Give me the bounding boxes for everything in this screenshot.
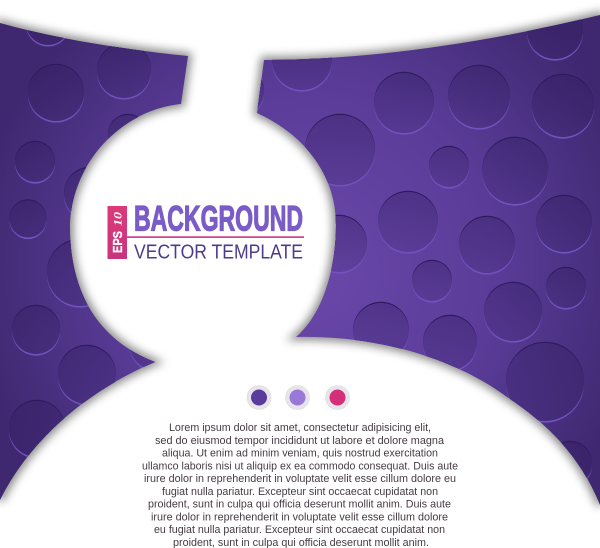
badge: EPS 10: 10 <box>110 212 124 226</box>
heading: BACKGROUND: BACKGROUND <box>134 200 303 238</box>
body text: fugiat nulla pariatur. Excepteur sint occaecat cupidatat non <box>162 486 438 498</box>
badge: EPS 10 <box>108 206 127 259</box>
body text: proident, sunt in culpa qui officia deserunt mollit anim. Duis aute <box>148 498 451 510</box>
body text: ullamco laboris nisi ut aliquip ex ea commodo consequat. Duis aute <box>142 460 458 472</box>
body text <box>142 422 458 548</box>
body text: sed do eiusmod tempor incididunt ut labore et dolore magna <box>155 435 445 447</box>
badge: EPS 10: EPS <box>111 231 125 253</box>
subheading: VECTOR TEMPLATE: VECTOR TEMPLATE <box>134 242 303 264</box>
logo block <box>108 200 304 264</box>
body text: Lorem ipsum dolor sit amet, consectetur adipisicing elit, <box>169 422 431 434</box>
colour swatches <box>247 386 350 410</box>
body text: irure dolor in reprehenderit in voluptate velit esse cillum dolore eu <box>144 473 456 485</box>
body text: aliqua. Ut enim ad minim veniam, quis nostrud exercitation <box>162 448 438 460</box>
body text: irure dolor in reprehenderit in voluptate velit esse cillum dolore <box>151 511 448 523</box>
body text: eu fugiat nulla pariatur. Excepteur sint occaecat cupidatat non <box>154 524 445 536</box>
